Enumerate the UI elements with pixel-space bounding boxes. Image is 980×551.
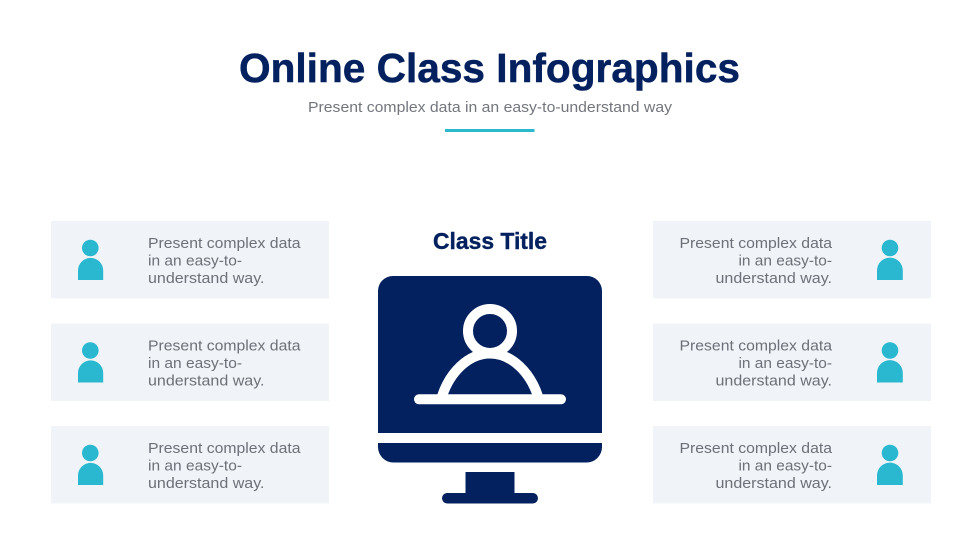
text block bbox=[680, 338, 833, 390]
text block: Present complex data bbox=[680, 338, 833, 354]
text block: Present complex data bbox=[148, 338, 301, 354]
text block: in an easy-to- bbox=[738, 355, 832, 372]
text block: in an easy-to- bbox=[738, 252, 832, 270]
text block: understand way. bbox=[716, 475, 832, 492]
text block bbox=[148, 235, 301, 287]
icon: person bbox=[78, 342, 103, 382]
icon: computer monitor with person bbox=[378, 276, 602, 504]
monitor screen bbox=[378, 276, 602, 433]
panel: left item 1 bbox=[51, 221, 329, 298]
text block: understand way. bbox=[148, 372, 264, 390]
text block bbox=[680, 440, 833, 492]
text block: Present complex data bbox=[148, 235, 301, 252]
text block: understand way. bbox=[148, 270, 264, 287]
text block: understand way. bbox=[716, 270, 832, 287]
panel: left item 3 bbox=[51, 426, 329, 504]
text block bbox=[680, 235, 833, 287]
text block: Present complex data bbox=[680, 235, 833, 252]
accent underline bbox=[445, 129, 534, 132]
text block: in an easy-to- bbox=[148, 458, 242, 474]
text block: Present complex data bbox=[680, 440, 833, 457]
text block bbox=[148, 440, 301, 492]
text block: in an easy-to- bbox=[738, 458, 832, 474]
text block: in an easy-to- bbox=[148, 355, 242, 372]
person outline on screen bbox=[419, 309, 561, 399]
text block: understand way. bbox=[148, 475, 264, 492]
icon: person bbox=[877, 342, 903, 382]
text block: Present complex data bbox=[148, 440, 301, 457]
panel: right item 2 bbox=[653, 324, 931, 401]
heading: class title: Class Title bbox=[433, 228, 547, 254]
text block bbox=[148, 338, 301, 390]
icon: person bbox=[78, 240, 103, 280]
panel: left item 2 bbox=[51, 324, 329, 401]
text block: understand way. bbox=[716, 372, 832, 390]
title: Online Class Infographics bbox=[239, 45, 740, 91]
subtitle: Present complex data in an easy-to-understand way bbox=[308, 99, 673, 116]
monitor stand bbox=[442, 472, 538, 504]
text block: in an easy-to- bbox=[148, 252, 242, 270]
panel: right item 3 bbox=[653, 426, 931, 504]
icon: person bbox=[877, 240, 903, 280]
icon: person bbox=[78, 445, 103, 485]
monitor bottom bezel bbox=[378, 443, 602, 462]
panel: right item 1 bbox=[653, 221, 931, 298]
icon: person bbox=[877, 445, 903, 485]
